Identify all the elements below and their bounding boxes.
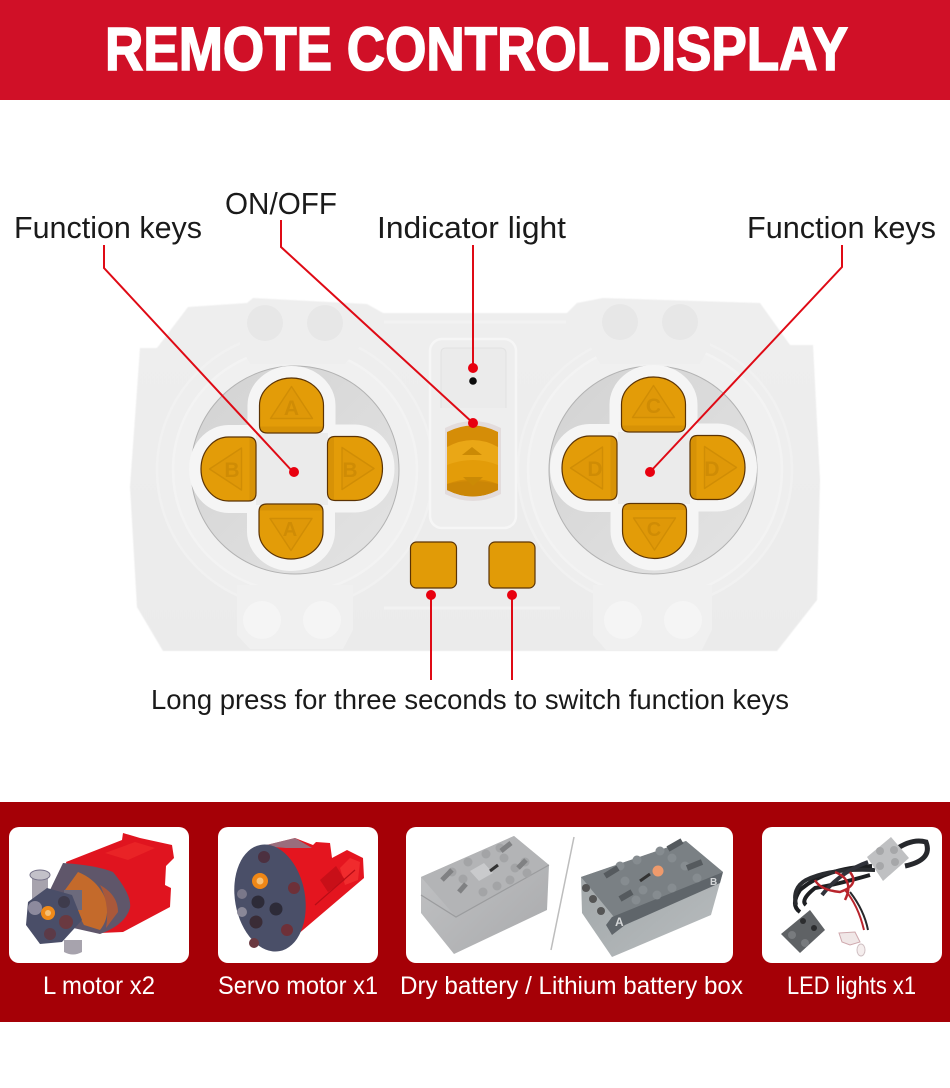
button D right	[690, 436, 745, 500]
label: on/off: ON/OFF	[225, 186, 337, 221]
button B right: B	[342, 459, 358, 482]
card: LED lights	[762, 827, 942, 963]
left mode button	[410, 542, 456, 588]
label: indicator light: Indicator light	[377, 210, 566, 245]
caption: LED lights: LED lights x1	[787, 972, 916, 1000]
right mode button	[489, 542, 535, 588]
button B right	[328, 436, 382, 500]
label: function keys right: Function keys	[747, 210, 936, 245]
callout lines	[104, 220, 842, 680]
card: servo motor	[218, 827, 378, 963]
header banner	[0, 0, 950, 100]
outer rings	[157, 332, 792, 608]
button D left: D	[587, 458, 603, 481]
caption: batteries: Dry battery / Lithium battery box	[400, 972, 743, 1000]
button A up	[260, 378, 324, 433]
icon: servo motor	[226, 838, 364, 957]
button A down: A	[283, 519, 297, 541]
label: long press: Long press for three seconds to switch function keys	[151, 684, 789, 715]
remote control body	[130, 298, 820, 651]
button C up: C	[646, 395, 661, 418]
title: REMOTE CONTROL DISPLAY	[105, 15, 848, 83]
button D left	[562, 436, 617, 500]
icon: LED lights	[781, 837, 927, 956]
button D right: D	[704, 458, 720, 481]
label: function keys left: Function keys	[14, 210, 202, 245]
right dial	[549, 366, 757, 574]
card: L motor	[9, 827, 189, 963]
caption: servo motor: Servo motor x1	[218, 972, 378, 1000]
button B left	[201, 437, 256, 501]
button B left: B	[224, 459, 240, 482]
icon: divider slash	[551, 837, 574, 950]
icon: dry battery box	[421, 836, 549, 954]
callout dots	[289, 363, 655, 600]
card: battery boxes	[406, 827, 733, 963]
button C up	[622, 377, 686, 432]
battery letter B: B	[710, 877, 717, 888]
battery letter A: A	[615, 915, 624, 929]
indicator light	[469, 377, 477, 385]
icon: lithium battery box	[581, 841, 723, 957]
button A up: A	[284, 397, 299, 420]
button A down	[259, 504, 323, 559]
slide switch	[445, 421, 501, 501]
mounting tabs and studs	[237, 299, 712, 650]
center switch panel	[430, 339, 516, 528]
icon: L motor	[26, 833, 174, 954]
button C down	[622, 504, 686, 558]
left dial	[191, 366, 399, 574]
accessories band	[0, 802, 950, 1022]
button C down: C	[647, 519, 661, 541]
caption: L motor: L motor x2	[43, 972, 155, 1000]
